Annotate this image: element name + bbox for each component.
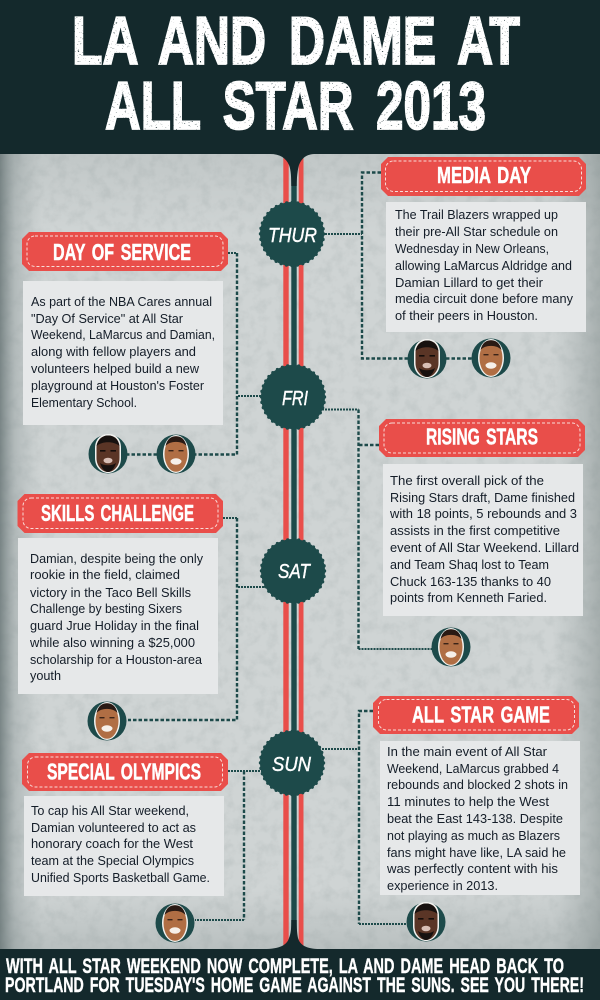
banner: Skills Challenge: SKILLS CHALLENGE [41, 500, 194, 526]
text block: Day of Service: Elementary School. [31, 396, 137, 410]
text block: Skills Challenge: scholarship for a Houston-area [30, 653, 202, 667]
panel: All Star Game [373, 696, 580, 895]
panel: Skills Challenge [18, 494, 223, 694]
banner: Media Day [381, 157, 586, 196]
text block: Rising Stars: assists in the first competitive [390, 524, 560, 538]
text block: Special Olympics: To cap his All Star weekend, [31, 804, 189, 818]
text block: Media Day: The Trail Blazers wrapped up [395, 208, 558, 222]
banner: Day of Service: DAY OF SERVICE [53, 239, 191, 265]
text block: All Star Game [380, 741, 580, 895]
text block: Rising Stars: points from Kenneth Faried. [390, 591, 547, 605]
text block: Skills Challenge: Challenge by besting Sixers [30, 602, 182, 616]
banner: All Star Game [373, 696, 579, 734]
footer message [5, 954, 584, 997]
text block: Skills Challenge [18, 538, 218, 694]
connector: Friday to Rising Stars [322, 410, 432, 649]
day badge: Friday: FRI [282, 388, 308, 410]
banner: Rising Stars: RISING STARS [426, 424, 538, 450]
connector: Saturday to Skills Challenge [128, 518, 264, 720]
text block: Media Day: allowing LaMarcus Aldridge and [395, 259, 572, 273]
banner: Day of Service [22, 232, 228, 271]
text block: Special Olympics: Damian volunteered to act as [31, 821, 196, 835]
text block: Rising Stars: Rising Stars draft, Dame finished [390, 491, 575, 505]
icon: Damian portrait, Rising Stars [432, 628, 470, 666]
connector: Thursday to Media Day [322, 172, 472, 358]
text block: All Star Game: beat the East 143-138. Despite [387, 812, 563, 826]
text block: Skills Challenge: while also winning a $25,000 [29, 636, 195, 650]
connector: Sunday to Special Olympics [195, 771, 262, 920]
banner: Rising Stars [379, 419, 585, 457]
icon: Damian portrait, Skills Challenge [88, 702, 126, 740]
panel: Media Day [381, 157, 586, 332]
text block: Day of Service: As part of the NBA Cares annual [31, 295, 212, 309]
day badge: Thursday: THUR [268, 225, 317, 247]
icon: Damian portrait, Special Olympics [156, 904, 194, 942]
text block: Media Day: of their peers in Houston. [395, 309, 538, 323]
text block: Special Olympics [24, 796, 224, 896]
text block: Skills Challenge: Damian, despite being the only [30, 552, 204, 566]
text block: All Star Game: rebounds and blocked 2 shots in [387, 778, 568, 792]
banner: Special Olympics: SPECIAL OLYMPICS [47, 758, 201, 784]
day badge: Sunday: SUN [272, 754, 312, 776]
text block: All Star Game: not playing as much as Blazers [387, 829, 560, 843]
day badge: Saturday: SAT [278, 561, 312, 583]
header band [0, 0, 600, 186]
connector: Sunday to All Star Game [322, 711, 407, 924]
text block: Day of Service: playground at Houston's Foster [31, 379, 204, 393]
text block: Day of Service: volunteers helped build a new [31, 362, 200, 376]
text block: Skills Challenge: rookie in the field, claimed [30, 568, 180, 582]
text block: Skills Challenge: guard Jrue Holiday in the final [30, 619, 199, 633]
text block: Day of Service: along with fellow players and [31, 345, 196, 359]
day badge: Saturday [261, 539, 325, 603]
icon: LaMarcus portrait, Media Day [408, 339, 446, 378]
text block: All Star Game: fans might have like, LA said he [387, 846, 566, 860]
text block: Day of Service: "Day Of Service" at All Star [31, 312, 183, 326]
panel: Day of Service [22, 232, 228, 425]
icon: Damian portrait, Media Day [472, 338, 510, 378]
connector: Friday to Day of Service [127, 253, 264, 454]
text block: Media Day [386, 202, 586, 332]
banner: Special Olympics [22, 753, 228, 791]
text block: Rising Stars: Chuck 163-135 thanks to 40 [390, 575, 551, 589]
text block: Special Olympics: Unified Sports Basketball Game. [31, 871, 210, 885]
text block: Media Day: media circuit done before many [395, 292, 574, 306]
text block: Skills Challenge: victory in the Taco Bell Skills [30, 586, 191, 600]
text block: All Star Game: was perfectly content with his [386, 862, 558, 876]
banner: Skills Challenge [18, 494, 223, 533]
text block: Rising Stars [383, 464, 583, 616]
text block: Day of Service: Weekend, LaMarcus and Damian, [31, 328, 215, 342]
text block: All Star Game: In the main event of All Star [387, 745, 547, 759]
text block: Skills Challenge: youth [30, 669, 61, 683]
text block: All Star Game: 11 minutes to help the West [387, 795, 550, 809]
text block: Rising Stars: The first overall pick of the [390, 474, 544, 488]
text block: All Star Game: Weekend, LaMarcus grabbed 4 [387, 762, 559, 776]
text block: All Star Game: experience in 2013. [387, 879, 498, 893]
text block: Special Olympics: team at the Special Olympics [31, 854, 194, 868]
text block: Rising Stars: event of All Star Weekend. Lillard [390, 541, 579, 555]
day badge: Friday [261, 365, 325, 429]
day badge: Thursday [260, 202, 324, 266]
icon: LaMarcus portrait, Day of Service [88, 434, 128, 474]
text block: Rising Stars: with 18 points, 5 rebounds and 3 [389, 507, 577, 521]
icon: Damian portrait, Day of Service [156, 434, 196, 474]
title [72, 3, 520, 144]
icon: LaMarcus portrait, All Star Game [406, 902, 446, 942]
footer band [0, 920, 600, 1000]
day badge: Sunday [260, 731, 324, 795]
text block: Special Olympics: honorary coach for the West [31, 837, 194, 851]
panel: Rising Stars [379, 419, 585, 616]
text block: Media Day: their pre-All Star schedule on [395, 225, 558, 239]
panel: Special Olympics [22, 753, 228, 896]
banner: Media Day: MEDIA DAY [437, 162, 531, 188]
text block: Media Day: Wednesday in New Orleans, [395, 242, 549, 256]
central timeline stripes [283, 154, 304, 950]
text block: Day of Service [23, 281, 223, 425]
text block: Media Day: Damian Lillard to get their [395, 276, 543, 290]
text block: Rising Stars: and Team Shaq lost to Team [390, 558, 549, 572]
